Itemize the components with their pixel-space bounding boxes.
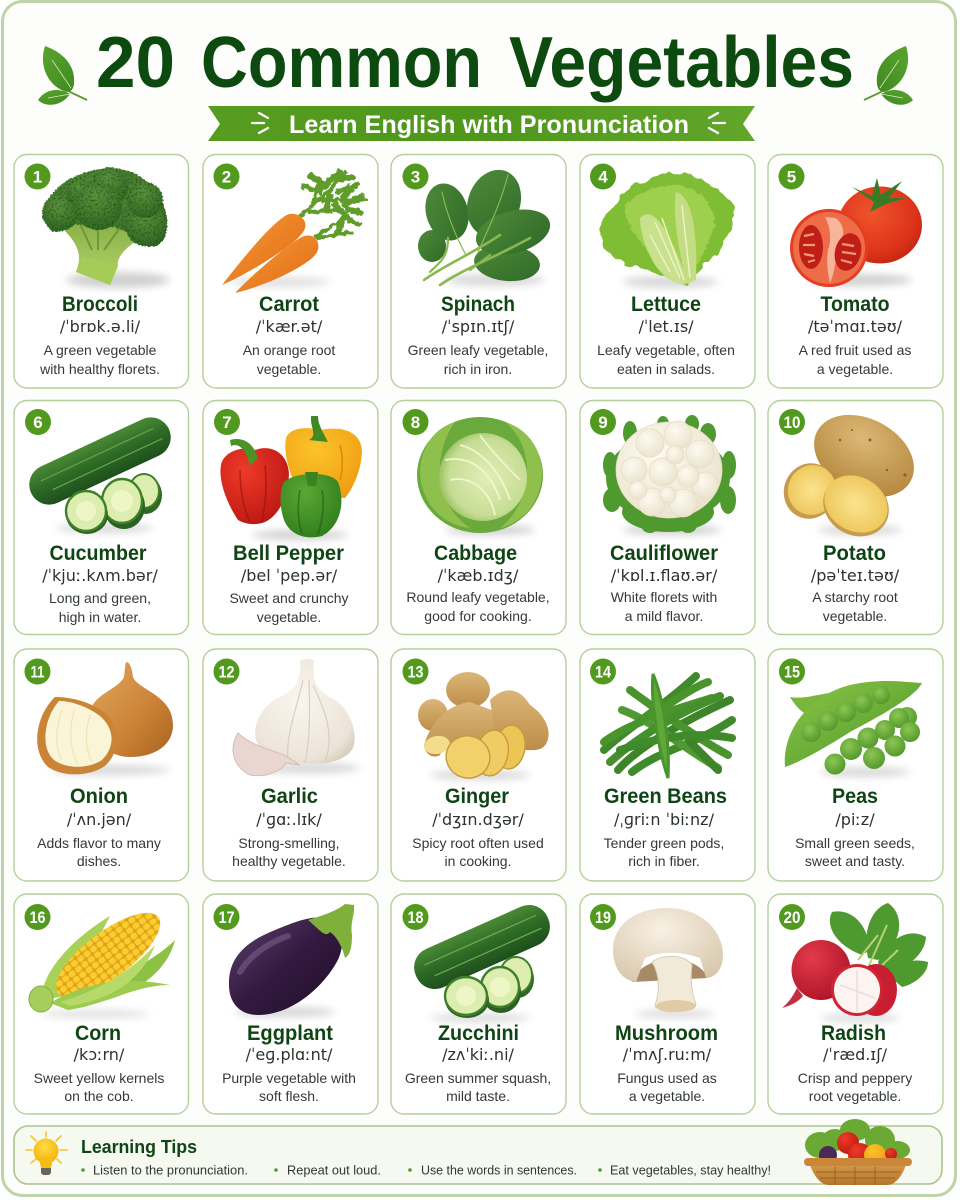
description: Fungus used as xyxy=(617,1070,717,1086)
title: Common xyxy=(201,23,482,103)
badge 12 xyxy=(214,658,240,684)
badge 10: 10 xyxy=(784,413,800,432)
pronunciation: /ˈlet.ɪs/ xyxy=(638,317,694,336)
description: rich in iron. xyxy=(444,361,512,377)
panel: learning tips xyxy=(14,1119,942,1185)
badge 19: 19 xyxy=(595,908,611,927)
pronunciation: /ˈkɒl.ɪ.flaʊ.ər/ xyxy=(611,566,718,585)
description: Tender green pods, xyxy=(604,835,724,851)
pronunciation: /pəˈteɪ.təʊ/ xyxy=(811,566,900,585)
pronunciation: /kɔːrn/ xyxy=(74,1045,125,1064)
name: Tomato xyxy=(820,293,890,316)
panel: card 18 zucchini xyxy=(391,894,566,1114)
pronunciation: /piːz/ xyxy=(835,810,875,829)
name: Radish xyxy=(821,1022,886,1045)
badge 5: 5 xyxy=(787,168,796,186)
pronunciation: /ˈeɡ.plɑːnt/ xyxy=(246,1045,333,1064)
name: Potato xyxy=(823,542,886,565)
description: Crisp and peppery xyxy=(798,1070,912,1086)
description: sweet and tasty. xyxy=(805,853,905,869)
panel: card 6 cucumber xyxy=(14,400,188,634)
icon: garlic xyxy=(233,659,360,776)
badge 3 xyxy=(402,164,428,190)
panel: card 10 potato xyxy=(768,398,943,634)
description: A starchy root xyxy=(812,589,898,605)
badge 3: 3 xyxy=(411,168,420,186)
title: 20 xyxy=(96,23,175,103)
name: Eggplant xyxy=(247,1022,333,1045)
name: Cauliflower xyxy=(610,542,718,565)
icon: right leaves xyxy=(864,46,913,105)
icon: radish xyxy=(782,903,928,1022)
badge 12: 12 xyxy=(218,662,234,682)
icon: peas xyxy=(785,681,922,777)
badge 20: 20 xyxy=(784,908,800,927)
description: Small green seeds, xyxy=(795,835,915,851)
description: in cooking. xyxy=(445,853,511,869)
description: rich in fiber. xyxy=(628,853,700,869)
description: vegetable. xyxy=(823,608,887,624)
pronunciation: /ˈkjuː.kʌm.bər/ xyxy=(42,566,158,585)
pronunciation: /bel ˈpep.ər/ xyxy=(241,566,338,585)
description: mild taste. xyxy=(446,1088,510,1104)
description: with healthy florets. xyxy=(39,361,160,377)
name: Cucumber xyxy=(50,542,146,565)
description: Purple vegetable with xyxy=(222,1070,356,1086)
pronunciation: /ˈkæb.ɪdʒ/ xyxy=(438,566,519,585)
tips list: Eat vegetables, stay healthy! xyxy=(610,1164,771,1178)
panel: card 14 green beans xyxy=(580,649,755,881)
tips list: Repeat out loud. xyxy=(287,1164,381,1178)
panel: card 3 spinach xyxy=(391,154,566,388)
badge 13 xyxy=(402,658,428,684)
pronunciation: /ˈɡɑː.lɪk/ xyxy=(256,810,322,829)
badge 20 xyxy=(779,904,805,930)
description: Strong-smelling, xyxy=(238,835,340,851)
tips list: Use the words in sentences. xyxy=(421,1164,577,1178)
panel: card 11 onion xyxy=(14,649,188,881)
badge 9 xyxy=(590,409,616,435)
name: Corn xyxy=(75,1022,121,1045)
badge 4: 4 xyxy=(598,168,608,186)
description: An orange root xyxy=(243,342,335,358)
badge 17: 17 xyxy=(218,908,234,927)
badge 17 xyxy=(214,904,240,930)
icon: cabbage xyxy=(417,417,543,535)
badge 2: 2 xyxy=(222,168,231,186)
panel: card 17 eggplant xyxy=(203,894,378,1114)
name: Mushroom xyxy=(615,1022,718,1045)
description: Spicy root often used xyxy=(412,835,544,851)
description: vegetable. xyxy=(257,609,321,625)
badge 14 xyxy=(590,658,616,684)
badge 11: 11 xyxy=(30,662,44,682)
badge 13: 13 xyxy=(408,662,424,682)
subtitle ribbon: Learn English with Pronunciation xyxy=(289,111,689,139)
badge 1: 1 xyxy=(33,168,42,186)
name: Green Beans xyxy=(604,785,727,808)
pronunciation: /ˌɡriːn ˈbiːnz/ xyxy=(614,810,715,829)
panel: card 1 broccoli xyxy=(14,154,188,388)
description: a mild flavor. xyxy=(625,608,703,624)
icon: light bulb xyxy=(26,1132,67,1175)
pronunciation: /ˈmʌʃ.ruːm/ xyxy=(623,1045,712,1064)
name: Broccoli xyxy=(62,293,138,316)
pronunciation: /ˈbrɒk.ə.li/ xyxy=(60,317,141,336)
panel: card 16 corn xyxy=(14,894,188,1114)
icon: lettuce xyxy=(600,172,734,288)
name: Bell Pepper xyxy=(233,542,344,565)
description: White florets with xyxy=(611,589,717,605)
tips list: Listen to the pronunciation. xyxy=(93,1164,248,1178)
panel: card 20 radish xyxy=(768,894,943,1114)
title xyxy=(96,23,854,103)
icon: ginger xyxy=(418,672,549,784)
icon: bell peppers xyxy=(220,416,362,540)
badge 11 xyxy=(24,658,50,684)
description: a vegetable. xyxy=(817,361,893,377)
description: healthy vegetable. xyxy=(232,853,346,869)
icon: green beans xyxy=(604,674,732,778)
badge 6 xyxy=(25,409,51,435)
name: Lettuce xyxy=(631,293,701,316)
name: Cabbage xyxy=(434,542,517,565)
badge 14: 14 xyxy=(595,662,611,682)
description: vegetable. xyxy=(257,361,321,377)
icon: corn xyxy=(29,899,175,1018)
badge 7 xyxy=(214,409,240,435)
icon: cucumber xyxy=(23,411,177,534)
badge 8: 8 xyxy=(411,413,420,432)
description: Leafy vegetable, often xyxy=(597,342,735,358)
description: good for cooking. xyxy=(424,608,532,624)
name: Peas xyxy=(832,785,878,808)
name: Carrot xyxy=(259,293,319,316)
subtitle ribbon xyxy=(208,106,755,141)
icon: tomato xyxy=(790,178,922,287)
badge 6: 6 xyxy=(33,413,43,432)
description: Green leafy vegetable, xyxy=(408,342,548,358)
icon: vegetable basket xyxy=(804,1119,912,1185)
pronunciation: /ˈkær.ət/ xyxy=(256,317,323,336)
panel: card 15 peas xyxy=(768,649,943,881)
description: A green vegetable xyxy=(44,342,157,358)
badge 18 xyxy=(402,904,428,930)
pronunciation: /ˈdʒɪn.dʒər/ xyxy=(432,810,524,829)
name: Onion xyxy=(70,785,128,808)
description: Long and green, xyxy=(49,590,151,606)
badge 16 xyxy=(24,904,50,930)
description: Adds flavor to many xyxy=(37,835,161,851)
pronunciation: /ˈspɪn.ɪtʃ/ xyxy=(442,317,515,336)
description: a vegetable. xyxy=(629,1088,705,1104)
description: dishes. xyxy=(77,853,121,869)
badge 7: 7 xyxy=(222,413,232,432)
description: Round leafy vegetable, xyxy=(406,589,550,605)
badge 2 xyxy=(214,164,240,190)
panel: card 9 cauliflower xyxy=(580,400,755,634)
icon: zucchini xyxy=(408,899,556,1022)
badge 9: 9 xyxy=(598,413,608,432)
icon: potato xyxy=(776,398,928,548)
description: A red fruit used as xyxy=(799,342,911,358)
icon: carrot xyxy=(222,172,365,293)
heading: Learning Tips xyxy=(81,1136,197,1157)
icon: left leaves xyxy=(38,46,87,105)
tips list xyxy=(81,1164,771,1178)
badge 4 xyxy=(590,164,616,190)
icon: spinach xyxy=(418,162,555,286)
title: Vegetables xyxy=(509,23,854,103)
icon: onion xyxy=(37,662,173,775)
panel: card 7 bell pepper xyxy=(203,400,378,634)
description: high in water. xyxy=(59,609,141,625)
description: root vegetable. xyxy=(809,1088,901,1104)
name: Spinach xyxy=(441,293,515,316)
description: Sweet and crunchy xyxy=(229,590,349,606)
description: Green summer squash, xyxy=(405,1070,551,1086)
icon: broccoli xyxy=(42,167,170,288)
description: soft flesh. xyxy=(259,1088,319,1104)
icon: cauliflower xyxy=(603,415,736,535)
pronunciation: /ˈræd.ɪʃ/ xyxy=(823,1045,888,1064)
panel: card 5 tomato xyxy=(768,154,943,388)
badge 1 xyxy=(24,164,50,190)
panel: card 4 lettuce xyxy=(580,154,755,388)
badge 5 xyxy=(778,164,804,190)
badge 18: 18 xyxy=(408,908,424,927)
panel: card 8 cabbage xyxy=(391,400,566,634)
panel: card 12 garlic xyxy=(203,649,378,881)
panel: card 13 ginger xyxy=(391,649,566,881)
pronunciation: /zʌˈkiː.ni/ xyxy=(442,1045,515,1064)
badge 8 xyxy=(402,409,428,435)
name: Ginger xyxy=(445,785,509,808)
pronunciation: /ˈʌn.jən/ xyxy=(67,810,132,829)
icon: eggplant xyxy=(229,904,354,1017)
description: Sweet yellow kernels xyxy=(34,1070,164,1086)
badge 16: 16 xyxy=(30,908,46,927)
description: on the cob. xyxy=(64,1088,134,1104)
badge 15 xyxy=(779,658,805,684)
pronunciation: /təˈmɑɪ.təʊ/ xyxy=(808,317,903,336)
name: Garlic xyxy=(261,785,318,808)
badge 15: 15 xyxy=(784,662,800,682)
name: Zucchini xyxy=(438,1022,519,1045)
badge 10 xyxy=(779,409,805,435)
badge 19 xyxy=(590,904,616,930)
description: eaten in salads. xyxy=(617,361,715,377)
panel: card 19 mushroom xyxy=(580,894,755,1114)
icon: mushroom xyxy=(613,908,723,1018)
panel: card 2 carrot xyxy=(203,154,378,388)
